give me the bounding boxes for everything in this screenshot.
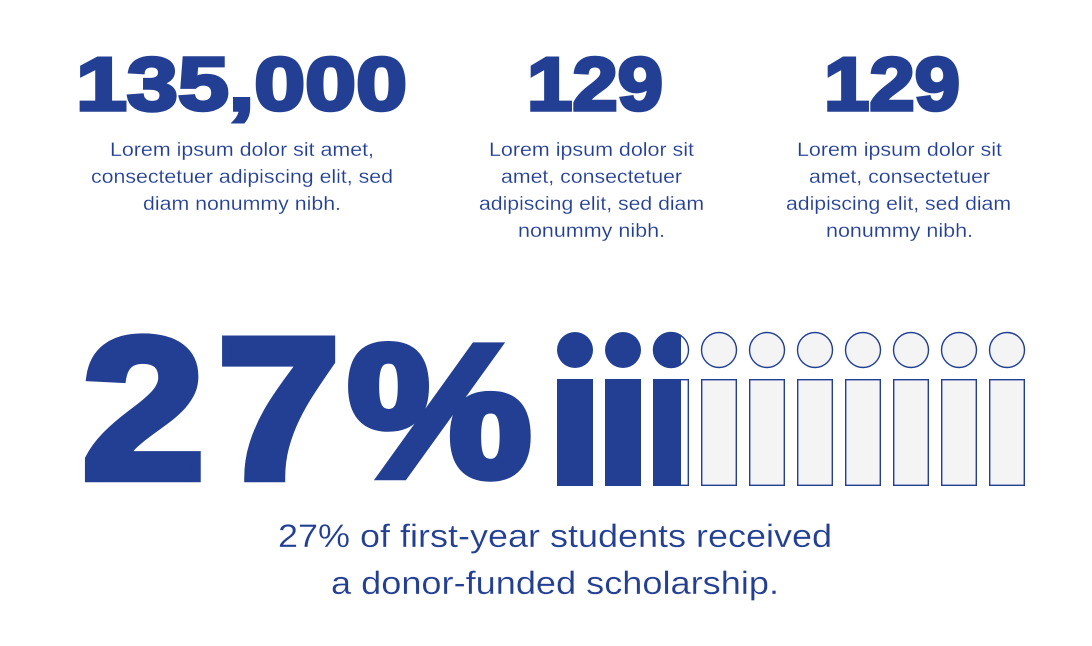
icon: empty person 9 <box>942 332 976 485</box>
caption: 27% of first-year students received <box>278 518 832 554</box>
large percentage: 27%: % <box>348 306 531 516</box>
caption: a donor-funded scholarship. <box>331 565 779 601</box>
description: 129 left: nonummy nibh. <box>518 221 665 242</box>
stat: 135,000 <box>76 42 407 215</box>
number: 129 left: 129 <box>527 42 663 126</box>
number: 135,000: 135,000 <box>76 42 407 126</box>
description: 129 left: adipiscing elit, sed diam <box>479 194 704 215</box>
icon: filled person 2 <box>605 332 641 486</box>
description: 129 right: Lorem ipsum dolor sit <box>797 140 1003 161</box>
description: 129 left: amet, consectetuer <box>501 167 683 188</box>
icon: empty person 7 <box>846 332 880 485</box>
description: 135,000: consectetuer adipiscing elit, sed <box>91 167 393 188</box>
icon: empty person 10 <box>990 332 1024 485</box>
description: 129 right: adipiscing elit, sed diam <box>786 194 1011 215</box>
icon: partly filled person 3 <box>653 332 688 486</box>
description: 135,000: diam nonummy nibh. <box>143 194 341 215</box>
description: 129 right <box>786 140 1011 242</box>
description: 129 right: nonummy nibh. <box>826 221 973 242</box>
icon: empty person 4 <box>702 332 736 485</box>
icon: empty person 8 <box>894 332 928 485</box>
large percentage: 27%: 27 <box>82 296 340 521</box>
icon: filled person 1 <box>557 332 593 486</box>
stat: 129 left <box>479 42 704 242</box>
icon: empty person 5 <box>750 332 784 485</box>
description: 135,000 <box>91 140 393 215</box>
description: 129 left: Lorem ipsum dolor sit <box>489 140 695 161</box>
description: 135,000: Lorem ipsum dolor sit amet, <box>110 140 374 161</box>
description: 129 right: amet, consectetuer <box>809 167 991 188</box>
pictogram: ten people, 27% filled <box>557 332 1024 486</box>
caption <box>278 518 832 601</box>
stat: 129 right <box>786 42 1011 242</box>
number: 129 right: 129 <box>824 42 960 126</box>
description: 129 left <box>479 140 704 242</box>
icon: empty person 6 <box>798 332 832 485</box>
